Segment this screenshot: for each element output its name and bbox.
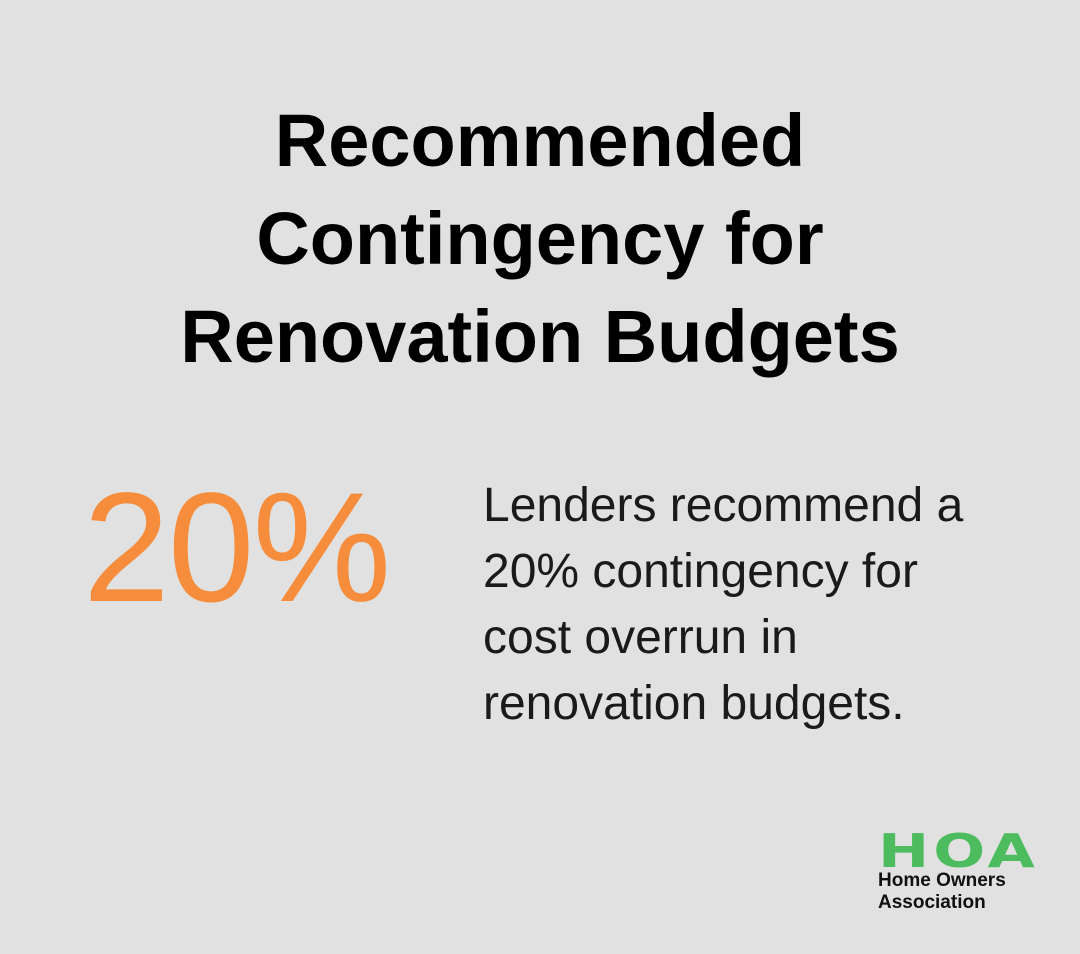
logo: HOA xyxy=(878,824,1039,913)
logo: HOA: Home Owners xyxy=(878,870,1006,891)
title xyxy=(180,99,900,378)
stat: 20%: 20% xyxy=(83,461,389,635)
description text: Lenders recommend a xyxy=(483,479,963,532)
logo: HOA: Association xyxy=(878,892,986,913)
description text: renovation budgets. xyxy=(483,677,905,730)
title: Recommended xyxy=(275,99,805,182)
title: Contingency for xyxy=(256,197,824,280)
logo: HOA: HOA xyxy=(878,824,1039,878)
description text xyxy=(483,479,964,730)
description text: cost overrun in xyxy=(483,611,798,664)
title: Renovation Budgets xyxy=(180,295,900,378)
description text: 20% contingency for xyxy=(483,545,918,598)
